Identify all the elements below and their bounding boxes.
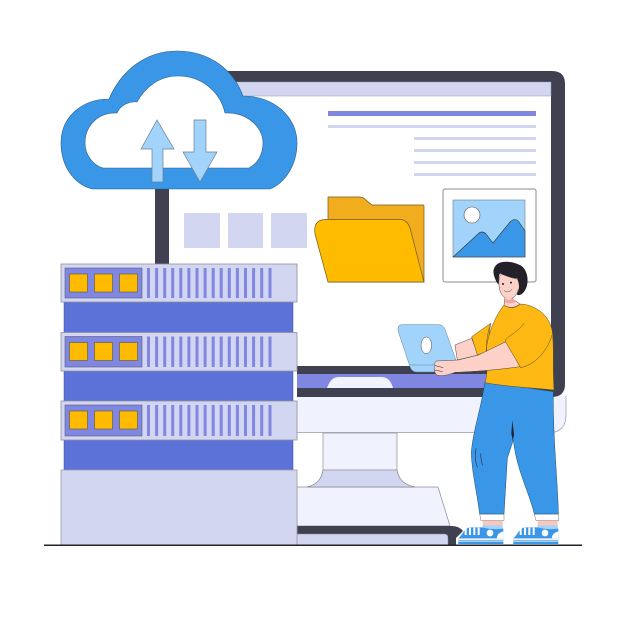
server unit 2 — [61, 332, 297, 371]
folder front — [315, 220, 424, 282]
monitor lower band — [297, 374, 497, 388]
screen content: text lines — [328, 111, 536, 176]
folder back — [328, 197, 424, 282]
front sleeve — [505, 304, 552, 368]
server unit 3 — [61, 401, 297, 440]
fingers — [435, 366, 443, 372]
server rack — [61, 264, 297, 545]
picture sky — [453, 200, 525, 257]
monitor stand neck — [307, 433, 415, 487]
monitor chin edge — [297, 396, 566, 432]
laptop — [398, 325, 458, 372]
arrow up — [141, 120, 174, 182]
trousers — [471, 382, 558, 514]
server base — [61, 470, 297, 545]
shoe left — [458, 527, 503, 544]
back arm — [455, 338, 478, 360]
monitor notch — [327, 377, 393, 388]
picture mountains — [453, 220, 525, 257]
neck and face — [499, 274, 523, 307]
base foot — [297, 534, 448, 545]
monitor stand base — [297, 487, 450, 526]
monitor title bar — [225, 82, 551, 96]
arrow down — [183, 120, 217, 182]
cloud shape — [61, 51, 297, 189]
monitor — [155, 71, 566, 545]
server body — [64, 300, 293, 472]
hair — [493, 262, 528, 295]
shirt — [485, 304, 554, 390]
monitor chin — [297, 396, 566, 432]
icon: folder — [315, 197, 424, 282]
shoe right — [513, 527, 558, 544]
monitor dark strip — [297, 388, 497, 397]
trouser cuffs — [480, 514, 559, 521]
person upper body — [434, 262, 554, 390]
neck shadow — [505, 298, 517, 303]
picture frame — [443, 189, 536, 282]
server unit 1 — [61, 264, 297, 302]
front arm and hand — [434, 342, 520, 376]
screen content: thumbnail squares — [184, 213, 307, 248]
socks — [483, 525, 558, 530]
person legs — [458, 382, 559, 544]
sleeve edge — [505, 323, 552, 368]
ground line — [44, 544, 582, 546]
face details — [502, 282, 512, 292]
trouser crease — [511, 420, 514, 441]
back sleeve — [472, 323, 491, 355]
picture sun — [464, 207, 480, 223]
monitor bezel — [155, 71, 565, 397]
sleeve crease — [486, 323, 491, 352]
icon: picture — [443, 189, 536, 282]
icon: cloud — [61, 51, 297, 189]
knee wrinkles — [475, 448, 483, 467]
base dark bar — [297, 526, 463, 545]
ankles — [483, 520, 558, 526]
monitor stand flare — [307, 470, 415, 487]
